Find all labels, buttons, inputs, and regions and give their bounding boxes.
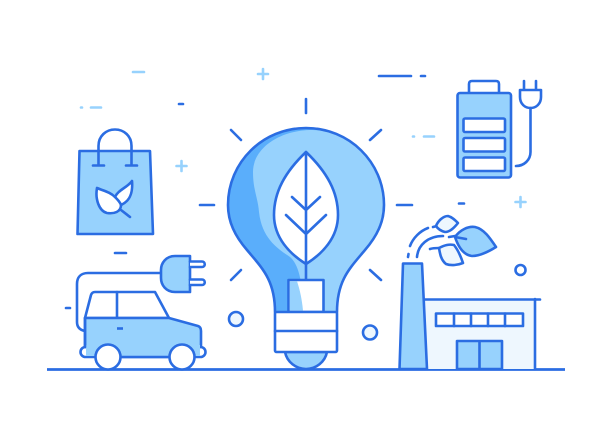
door xyxy=(457,341,502,369)
electric car xyxy=(77,256,206,370)
battery cord xyxy=(516,108,530,166)
wheels xyxy=(96,344,120,370)
bulb highlight xyxy=(253,130,384,312)
ground line xyxy=(47,368,565,371)
bulb cap bottom xyxy=(285,352,327,369)
car body xyxy=(85,318,201,347)
roof xyxy=(425,298,540,301)
decorative light dashes and plus signs xyxy=(81,69,526,207)
body lower band xyxy=(86,345,200,356)
window divider xyxy=(116,292,118,318)
base divider xyxy=(275,330,337,332)
building wall xyxy=(425,299,535,369)
battery with plug xyxy=(458,81,541,178)
battery cap xyxy=(469,81,499,93)
lower leaf xyxy=(439,245,463,265)
bulb glass xyxy=(228,128,384,312)
bag body xyxy=(78,151,153,234)
bulb outline xyxy=(228,128,384,312)
bulb base xyxy=(275,312,337,352)
battery plug xyxy=(520,81,541,108)
car bumper xyxy=(80,347,206,357)
bag leaf icon xyxy=(96,181,132,213)
factory xyxy=(400,216,540,369)
upper leaf xyxy=(436,216,458,232)
car cabin xyxy=(85,292,169,318)
small circles xyxy=(229,265,526,340)
charging cord xyxy=(77,273,161,331)
decorative dark dashes xyxy=(66,76,464,308)
battery body xyxy=(458,93,511,178)
bag handle xyxy=(93,130,137,166)
plug pins xyxy=(190,262,205,285)
smoke arcs xyxy=(408,226,455,257)
light bulb xyxy=(228,128,384,369)
leaf xyxy=(274,152,338,264)
shopping bag xyxy=(78,130,153,234)
leaf veins xyxy=(286,152,326,280)
chimney xyxy=(400,264,427,369)
large leaf xyxy=(455,227,496,256)
window strip xyxy=(436,314,523,326)
battery cells xyxy=(464,118,505,132)
bulb socket square xyxy=(288,280,324,312)
rays xyxy=(200,99,412,280)
plug xyxy=(161,256,190,292)
